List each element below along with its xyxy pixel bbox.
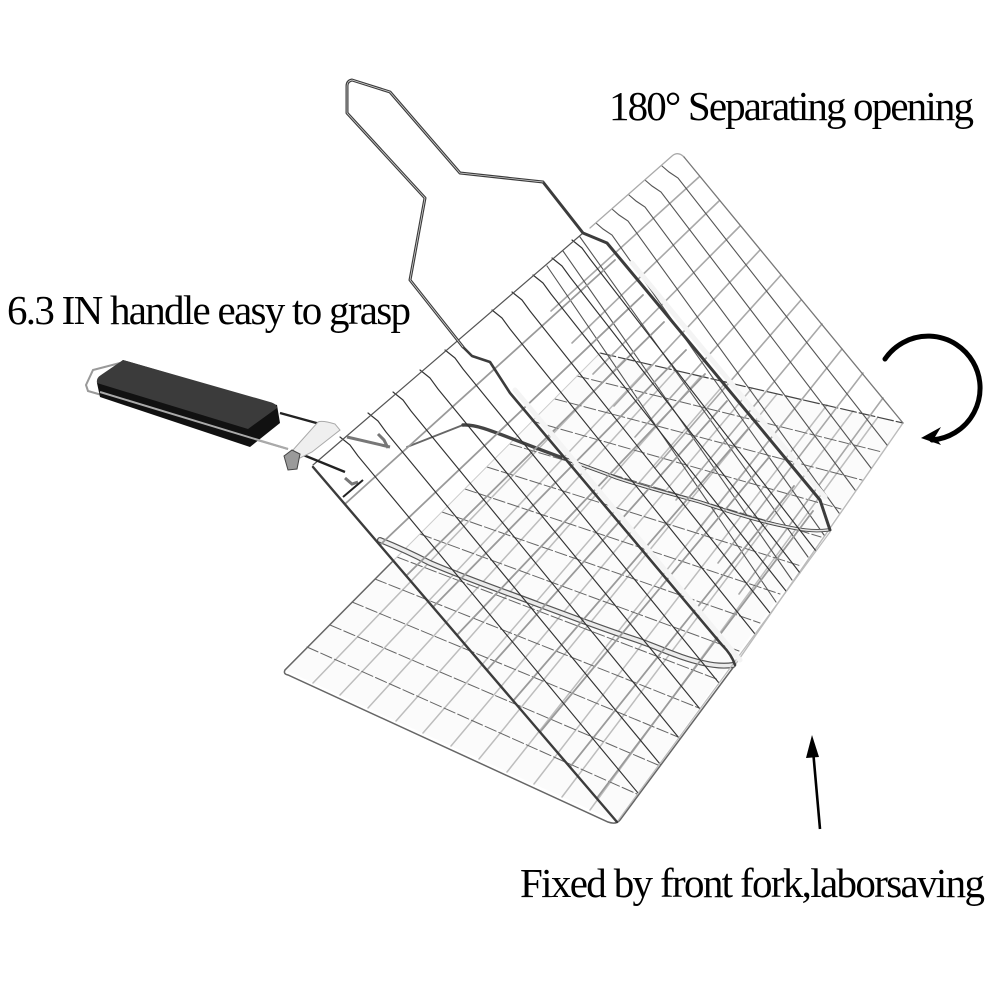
label: handle: 6.3 IN handle easy to grasp — [7, 287, 411, 333]
panel: front grill mesh with rails — [313, 233, 830, 822]
clip ring — [284, 450, 300, 470]
wire loop — [86, 363, 288, 449]
black lower handle with clip — [86, 360, 390, 497]
rail: centre — [463, 347, 735, 665]
silver clip — [293, 421, 340, 458]
silver wire over grip — [100, 392, 288, 449]
rail: left edge — [313, 467, 617, 822]
label: fixed by front fork: Fixed by front fork,laborsaving — [520, 860, 985, 906]
curved support rods — [380, 425, 828, 666]
arrow: curved rotation arrow — [885, 336, 980, 445]
arrow: up arrow to front fork — [806, 735, 820, 829]
handle grip top — [97, 360, 277, 429]
fork pieces — [345, 434, 390, 484]
panel: upright back grill mesh — [547, 154, 903, 602]
wires to clip — [280, 413, 345, 472]
handle grip side — [97, 360, 280, 447]
white highlight strips along rails — [515, 263, 825, 660]
label: separating opening: 180° Separating opening — [609, 83, 974, 129]
panel: bottom flat grill mesh — [284, 353, 903, 823]
wire top handle with right rail — [347, 80, 830, 530]
